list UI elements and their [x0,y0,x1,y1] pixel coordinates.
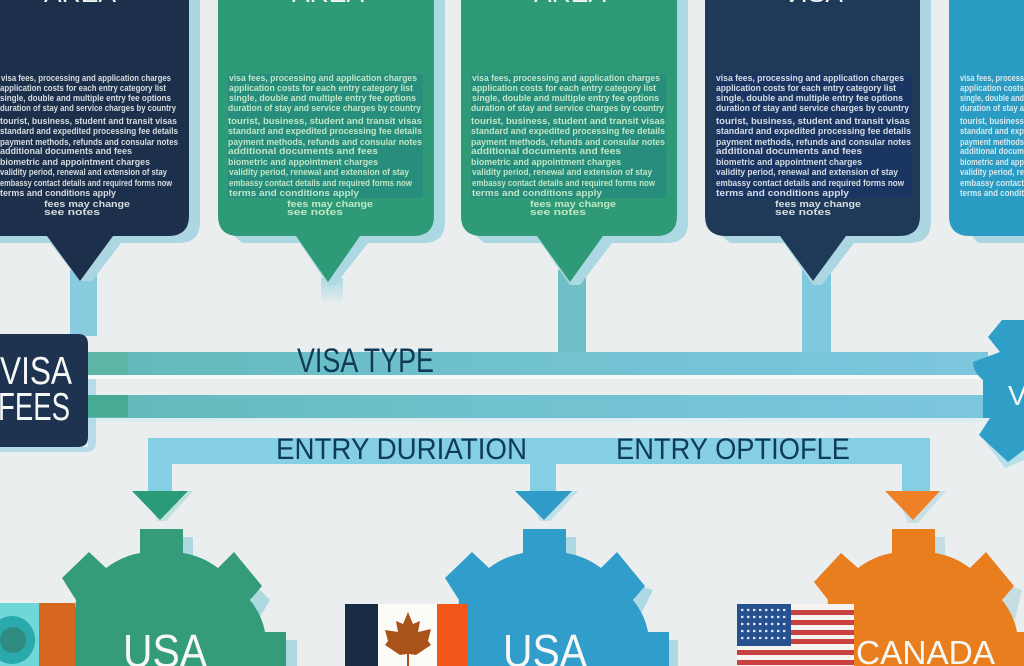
body text: validity period, renewal and extension of stay [472,167,653,178]
body text: payment methods, refunds and consular notes [716,137,911,148]
panel: area four [705,0,931,285]
body text: terms and conditions apply [229,188,360,199]
body text: duration of stay and service charges by country [716,103,910,114]
body text: terms and conditions apply [716,188,850,199]
body text: fees may change [44,199,130,210]
body text: single, double and multiple entry fee options [0,93,171,104]
body text: standard and expedited processing fee details [716,126,911,137]
body text [228,73,422,218]
body text: tourist, business, student and transit visas [716,116,910,127]
body text: tourist, business, student and transit visas [471,116,665,127]
box label: fees: FEES [0,386,70,429]
gear: blue [445,529,678,666]
body text: application costs for each entry category list [716,83,897,94]
body text: duration of stay and service charges by country [0,103,177,114]
body text: visa fees, processing and application charges [472,73,660,84]
flag: usa [737,604,854,666]
bar: second connector [88,395,988,422]
connector: panel 4 to visa type bar [802,270,831,354]
canton stars [741,610,788,638]
panel: area one [0,0,200,281]
body text: duration of stay and service charges by country [471,103,665,114]
box label: visa: VISA [0,350,72,393]
body text: single, double and multiple entry fee options [229,93,416,104]
body text: visa fees, processing and application charges [229,73,417,84]
body text [716,73,911,218]
gear: green [62,529,297,666]
icon: maple leaf [385,612,431,666]
body text [960,73,1024,199]
box shadow: visa fees [0,378,96,452]
body text: biometric and appointment charges [0,157,150,168]
body text: fees may change [530,199,616,210]
arrow: orange [885,491,946,523]
arrow: blue [515,491,578,521]
body text: fees may change [775,199,861,210]
label: visa type: VISA TYPE [297,342,434,380]
connector: panel 2 fading stem [321,278,343,304]
gear: orange [814,529,1024,666]
body text [0,73,178,218]
body text: biometric and appointment charges [228,157,378,168]
body text: see notes [44,207,100,218]
body text: standard and expedited processing fee details [228,126,422,137]
body text: terms and conditions apply [472,188,603,199]
body text: validity period, renewal and extension of stay [229,167,410,178]
body text: validity period, renewal and extension of stay [0,167,168,178]
body text: see notes [287,207,343,218]
body text: biometric and appointment charges [716,157,862,168]
body text: payment methods, refunds and consular notes [471,137,665,148]
body text: standard and expedited processing fee details [0,126,178,137]
body text: visa fees, processing and application charges [716,73,904,84]
body text: terms and conditions apply [0,188,117,199]
body text: standard and expedited processing fee details [471,126,665,137]
body text: application costs for each entry category list [0,83,167,94]
body text: single, double and multiple entry fee options [716,93,903,104]
body text: single, double and multiple entry fee options [472,93,659,104]
body text [471,73,665,218]
body text: visa fees, processing and application charges [1,73,171,84]
body text: application costs for each entry category list [229,83,414,94]
panel: area three [461,0,688,285]
flag: left partial [0,603,75,666]
body text: additional documents and fees [716,146,862,157]
body text: duration of stay and service charges by country [228,103,422,114]
body text: see notes [530,207,586,218]
body text: tourist, business, student and transit visas [228,116,422,127]
body text: embassy contact details and required forms now [0,178,172,189]
body text: see notes [775,207,831,218]
body text: fees may change [287,199,373,210]
body text: validity period, renewal and extension of stay [716,167,899,178]
panel: area two [218,0,445,285]
connector: panel 3 to visa type bar [558,270,586,354]
body text: payment methods, refunds and consular notes [228,137,422,148]
connector: panel 1 to visa fees [70,270,97,336]
body text: additional documents and fees [0,146,132,157]
label: entry duration: ENTRY DURIATION [276,433,527,466]
body text: additional documents and fees [228,146,378,157]
gear: blue right [973,320,1024,468]
body text: embassy contact details and required forms now [472,178,656,189]
body text: tourist, business, student and transit visas [0,116,177,127]
panel: area five [949,0,1024,243]
branch: lower distribution line [148,438,930,491]
body text: application costs for each entry category list [472,83,657,94]
body text: embassy contact details and required forms now [716,178,905,189]
arrow: green [132,491,193,521]
body text: additional documents and fees [471,146,621,157]
flag: canada style [345,604,468,666]
box: visa fees [0,334,88,447]
body text: biometric and appointment charges [471,157,621,168]
bar: visa type [88,352,988,379]
body text: embassy contact details and required forms now [229,178,413,189]
label: entry options: ENTRY OPTIOFLE [616,433,850,466]
body text: payment methods, refunds and consular notes [0,137,178,148]
